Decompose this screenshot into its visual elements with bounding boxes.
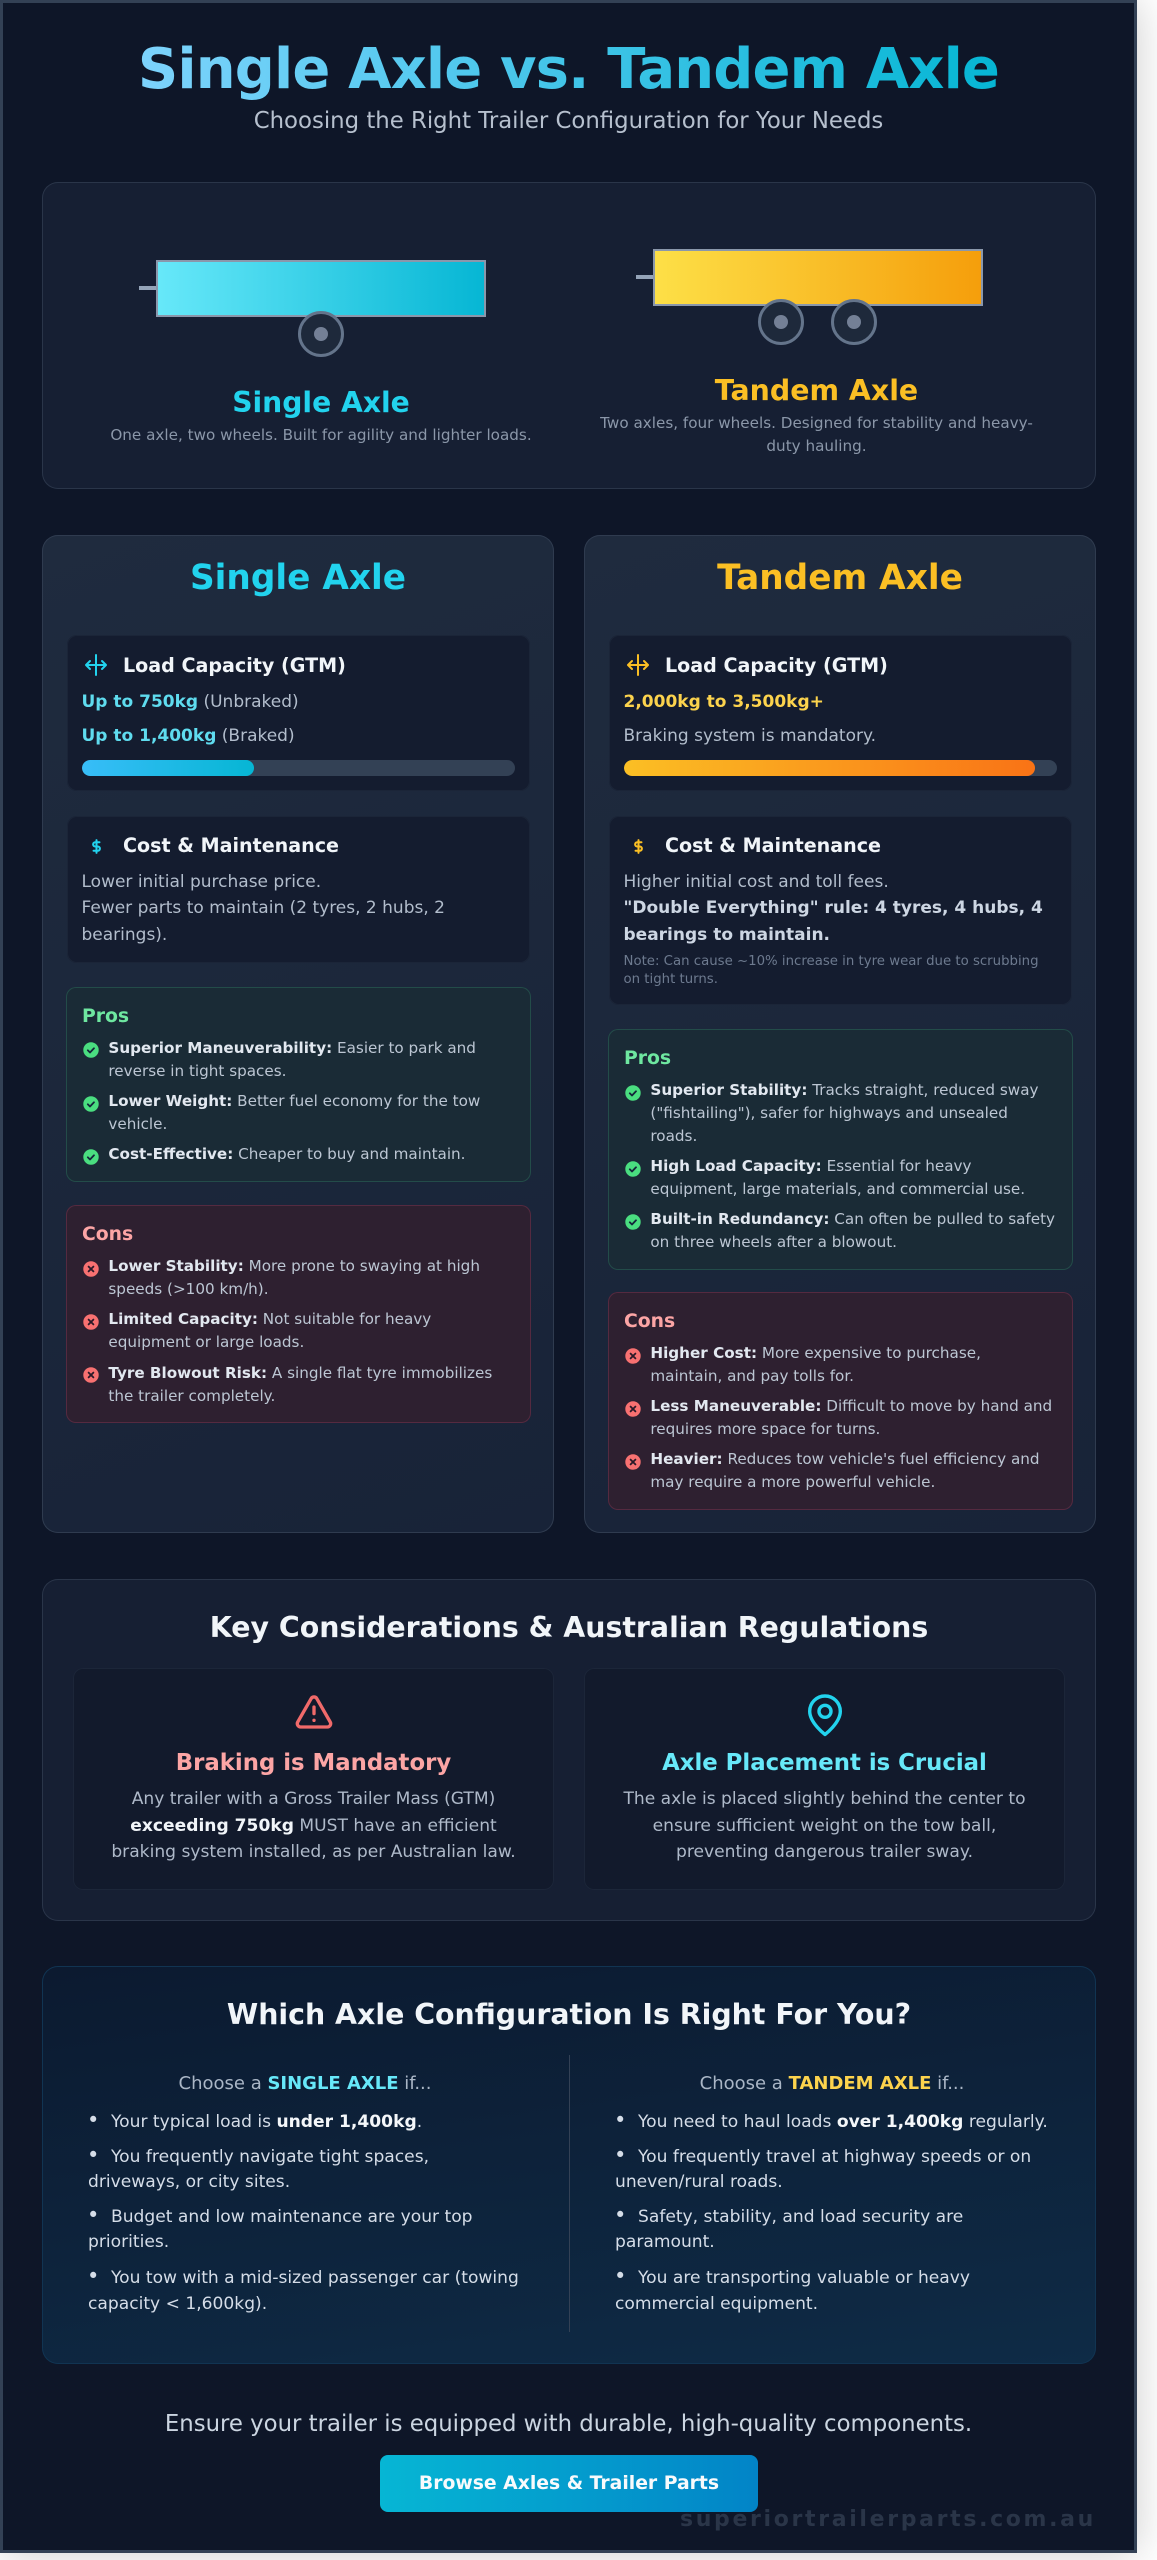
card heading: Cost & Maintenance [665,834,881,857]
bullet: • [614,2203,626,2227]
pro item [625,1157,1025,1198]
braking heading: Braking is Mandatory [176,1750,451,1776]
pro item: ("fishtailing"), safer for highways and unsealed [650,1104,1008,1122]
bullet [87,2143,429,2192]
bullet: You frequently navigate tight spaces, [111,2147,429,2167]
cost text: "Double Everything" rule: 4 tyres, 4 hubs, 4 [624,898,1043,918]
con item [625,1397,1052,1438]
icon: location pin [808,1694,842,1736]
bullet [615,2266,970,2318]
footer call to action [0,2405,1137,2517]
cost text: Fewer parts to maintain (2 tyres, 2 hubs, 2 [82,898,445,918]
pros heading: Pros [624,1048,671,1069]
capacity bar [624,760,1056,776]
bullet: Safety, stability, and load security are [638,2207,963,2227]
pro item: Built-in Redundancy: Can often be pulled to safety [650,1210,1055,1228]
icon: tandem axle trailer diagram [636,249,983,345]
tyre wear note: Note: Can cause ~10% increase in tyre wear due to scrubbing [624,954,1039,969]
con item: Less Maneuverable: Difficult to move by hand and [650,1397,1052,1415]
tyre wear note [624,954,1039,987]
icon: load arrows [85,654,107,676]
card: cost and maintenance [66,816,530,963]
bullet: • [614,2143,626,2167]
cons heading: Cons [624,1311,675,1332]
axle placement text: preventing dangerous trailer sway. [676,1842,973,1862]
bullet: • [87,2264,99,2288]
icon: dollar [92,839,101,854]
card: braking [73,1668,554,1890]
bullet: Budget and low maintenance are your top [111,2207,473,2227]
card: load capacity [608,635,1072,791]
cost text: bearings to maintain. [624,925,830,945]
column: choose single axle [87,2073,519,2314]
bullet: • [614,2108,626,2132]
con item: speeds (>100 km/h). [108,1280,269,1298]
con item: Heavier: Reduces tow vehicle's fuel efficiency and [650,1450,1040,1468]
pro item: reverse in tight spaces. [108,1062,286,1080]
card: axle placement [584,1668,1065,1890]
capacity unbraked: Up to 750kg (Unbraked) [82,692,299,712]
column heading: Choose a SINGLE AXLE if... [179,2073,431,2094]
capacity range: 2,000kg to 3,500kg+ [624,692,824,712]
card: cost and maintenance [608,816,1072,1005]
bullet: driveways, or city sites. [88,2172,290,2192]
pro item: Superior Stability: Tracks straight, reduced sway [650,1081,1039,1099]
heading: single axle: Single Axle [190,558,406,598]
icon: warning triangle [296,1695,332,1729]
panel: trailer overview [42,182,1096,489]
braking text: Any trailer with a Gross Trailer Mass (GTM) [132,1789,495,1809]
cost text [624,872,1043,945]
con item: Lower Stability: More prone to swaying at high [108,1257,480,1275]
pro item: High Load Capacity: Essential for heavy [650,1157,971,1175]
card heading: Load Capacity (GTM) [123,654,346,677]
bullet: • [87,2143,99,2167]
braking text: exceeding 750kg MUST have an efficient [130,1816,497,1836]
heading: tandem axle: Tandem Axle [717,558,963,598]
watermark: superiortrailerparts.com.au [680,2507,1096,2532]
capacity bar [82,760,514,776]
bullet: You tow with a mid-sized passenger car (towing [111,2268,519,2288]
subtitle: Choosing the Right Trailer Configuration for Your Needs [254,108,883,134]
con item [83,1310,431,1351]
heading: single axle: Single Axle [232,386,410,419]
card: cons [66,1205,531,1423]
bullet: • [87,2203,99,2227]
axle placement heading: Axle Placement is Crucial [662,1750,987,1776]
braking note: Braking system is mandatory. [624,726,876,746]
bullet [615,2205,963,2256]
card: pros [608,1029,1073,1270]
pro item: Cost-Effective: Cheaper to buy and maintain. [108,1145,466,1163]
con item: requires more space for turns. [650,1420,880,1438]
card: cons [608,1292,1073,1510]
tandem axle overview column [600,249,1033,454]
caption: single axle: One axle, two wheels. Built for agility and lighter loads. [110,426,532,444]
con item: the trailer completely. [108,1386,275,1404]
pro item [625,1081,1039,1145]
bullet: You are transporting valuable or heavy [638,2268,970,2288]
cost text [82,872,445,945]
bullet: capacity < 1,600kg). [88,2294,267,2314]
capacity braked: Up to 1,400kg (Braked) [82,726,295,746]
single axle overview column [110,260,532,444]
axle placement text: The axle is placed slightly behind the center to [623,1789,1026,1809]
con item: Tyre Blowout Risk: A single flat tyre immobilizes [108,1364,492,1382]
column heading: Choose a TANDEM AXLE if... [700,2073,964,2094]
cons heading: Cons [82,1224,133,1245]
bullet: paramount. [615,2232,715,2252]
bullet [87,2203,473,2252]
pro item [625,1210,1055,1251]
bullet: uneven/rural roads. [615,2172,783,2192]
pro item: on three wheels after a blowout. [650,1233,897,1251]
button: browse parts [380,2454,758,2512]
title: Single Axle vs. Tandem Axle [138,37,999,102]
con item: equipment or large loads. [108,1333,304,1351]
pros heading: Pros [82,1006,129,1027]
pro item: Superior Maneuverability: Easier to park and [108,1038,476,1056]
con item: maintain, and pay tolls for. [650,1367,854,1385]
header: title and subtitle [138,37,999,134]
card: pros [66,987,531,1182]
caption: tandem axle [600,414,1033,454]
card: load capacity [66,635,530,791]
card heading: Load Capacity (GTM) [665,654,888,677]
pro item: vehicle. [108,1115,167,1133]
column: choose tandem axle [569,2066,1095,2346]
divider between columns [569,2055,570,2332]
button: browse parts: Browse Axles & Trailer Parts [419,2473,719,2494]
heading: key considerations: Key Considerations & Australian Regulations [210,1611,928,1644]
panel: single axle details [42,535,554,1533]
caption: tandem axle: duty hauling. [766,436,867,454]
card: pros: roads. [650,1127,697,1145]
bullet: Your typical load is under 1,400kg. [111,2112,422,2132]
bullet: You need to haul loads over 1,400kg regularly. [638,2112,1048,2132]
call to action text: Ensure your trailer is equipped with durable, high-quality components. [165,2411,972,2437]
con item [83,1257,480,1298]
panel: key considerations [42,1579,1096,1921]
icon: load arrows [627,654,649,676]
bullet: commercial equipment. [615,2294,818,2314]
con item: Higher Cost: More expensive to purchase, [650,1344,981,1362]
bullet [87,2264,519,2314]
heading: which axle: Which Axle Configuration Is Right For You? [227,1998,911,2030]
con item [83,1364,492,1404]
pro item: equipment, large materials, and commercial use. [650,1180,1025,1198]
card heading: Cost & Maintenance [123,834,339,857]
cost text: bearings). [82,925,167,945]
bullet [615,2145,1031,2196]
icon: dollar [634,839,643,854]
bullet list [615,2066,1085,2306]
bullet list [87,2108,519,2314]
con item [625,1450,1040,1491]
con item: Limited Capacity: Not suitable for heavy [108,1310,431,1328]
axle placement text: ensure sufficient weight on the tow ball, [653,1816,996,1836]
panel: which axle configuration [42,1966,1096,2364]
bullet: You frequently travel at highway speeds or on [638,2147,1031,2167]
con item [625,1344,981,1385]
pro item [83,1092,480,1133]
tyre wear note: on tight turns. [624,972,718,987]
bullet: priorities. [88,2232,169,2252]
cost text: Higher initial cost and toll fees. [624,872,889,892]
con item: may require a more powerful vehicle. [650,1473,935,1491]
braking text: braking system installed, as per Australian law. [111,1842,516,1862]
heading: tandem axle: Tandem Axle [715,374,918,407]
pro item: Lower Weight: Better fuel economy for the tow [108,1092,480,1110]
bullet: • [614,2264,626,2288]
pro item [83,1038,476,1080]
caption: tandem axle: Two axles, four wheels. Designed for stability and heavy- [600,414,1033,432]
axle placement text [623,1789,1026,1862]
icon: single axle trailer diagram [139,260,486,357]
cost text: Lower initial purchase price. [82,872,321,892]
braking text [111,1789,516,1862]
bullet: • [87,2108,99,2132]
panel: tandem axle details [584,535,1096,1533]
